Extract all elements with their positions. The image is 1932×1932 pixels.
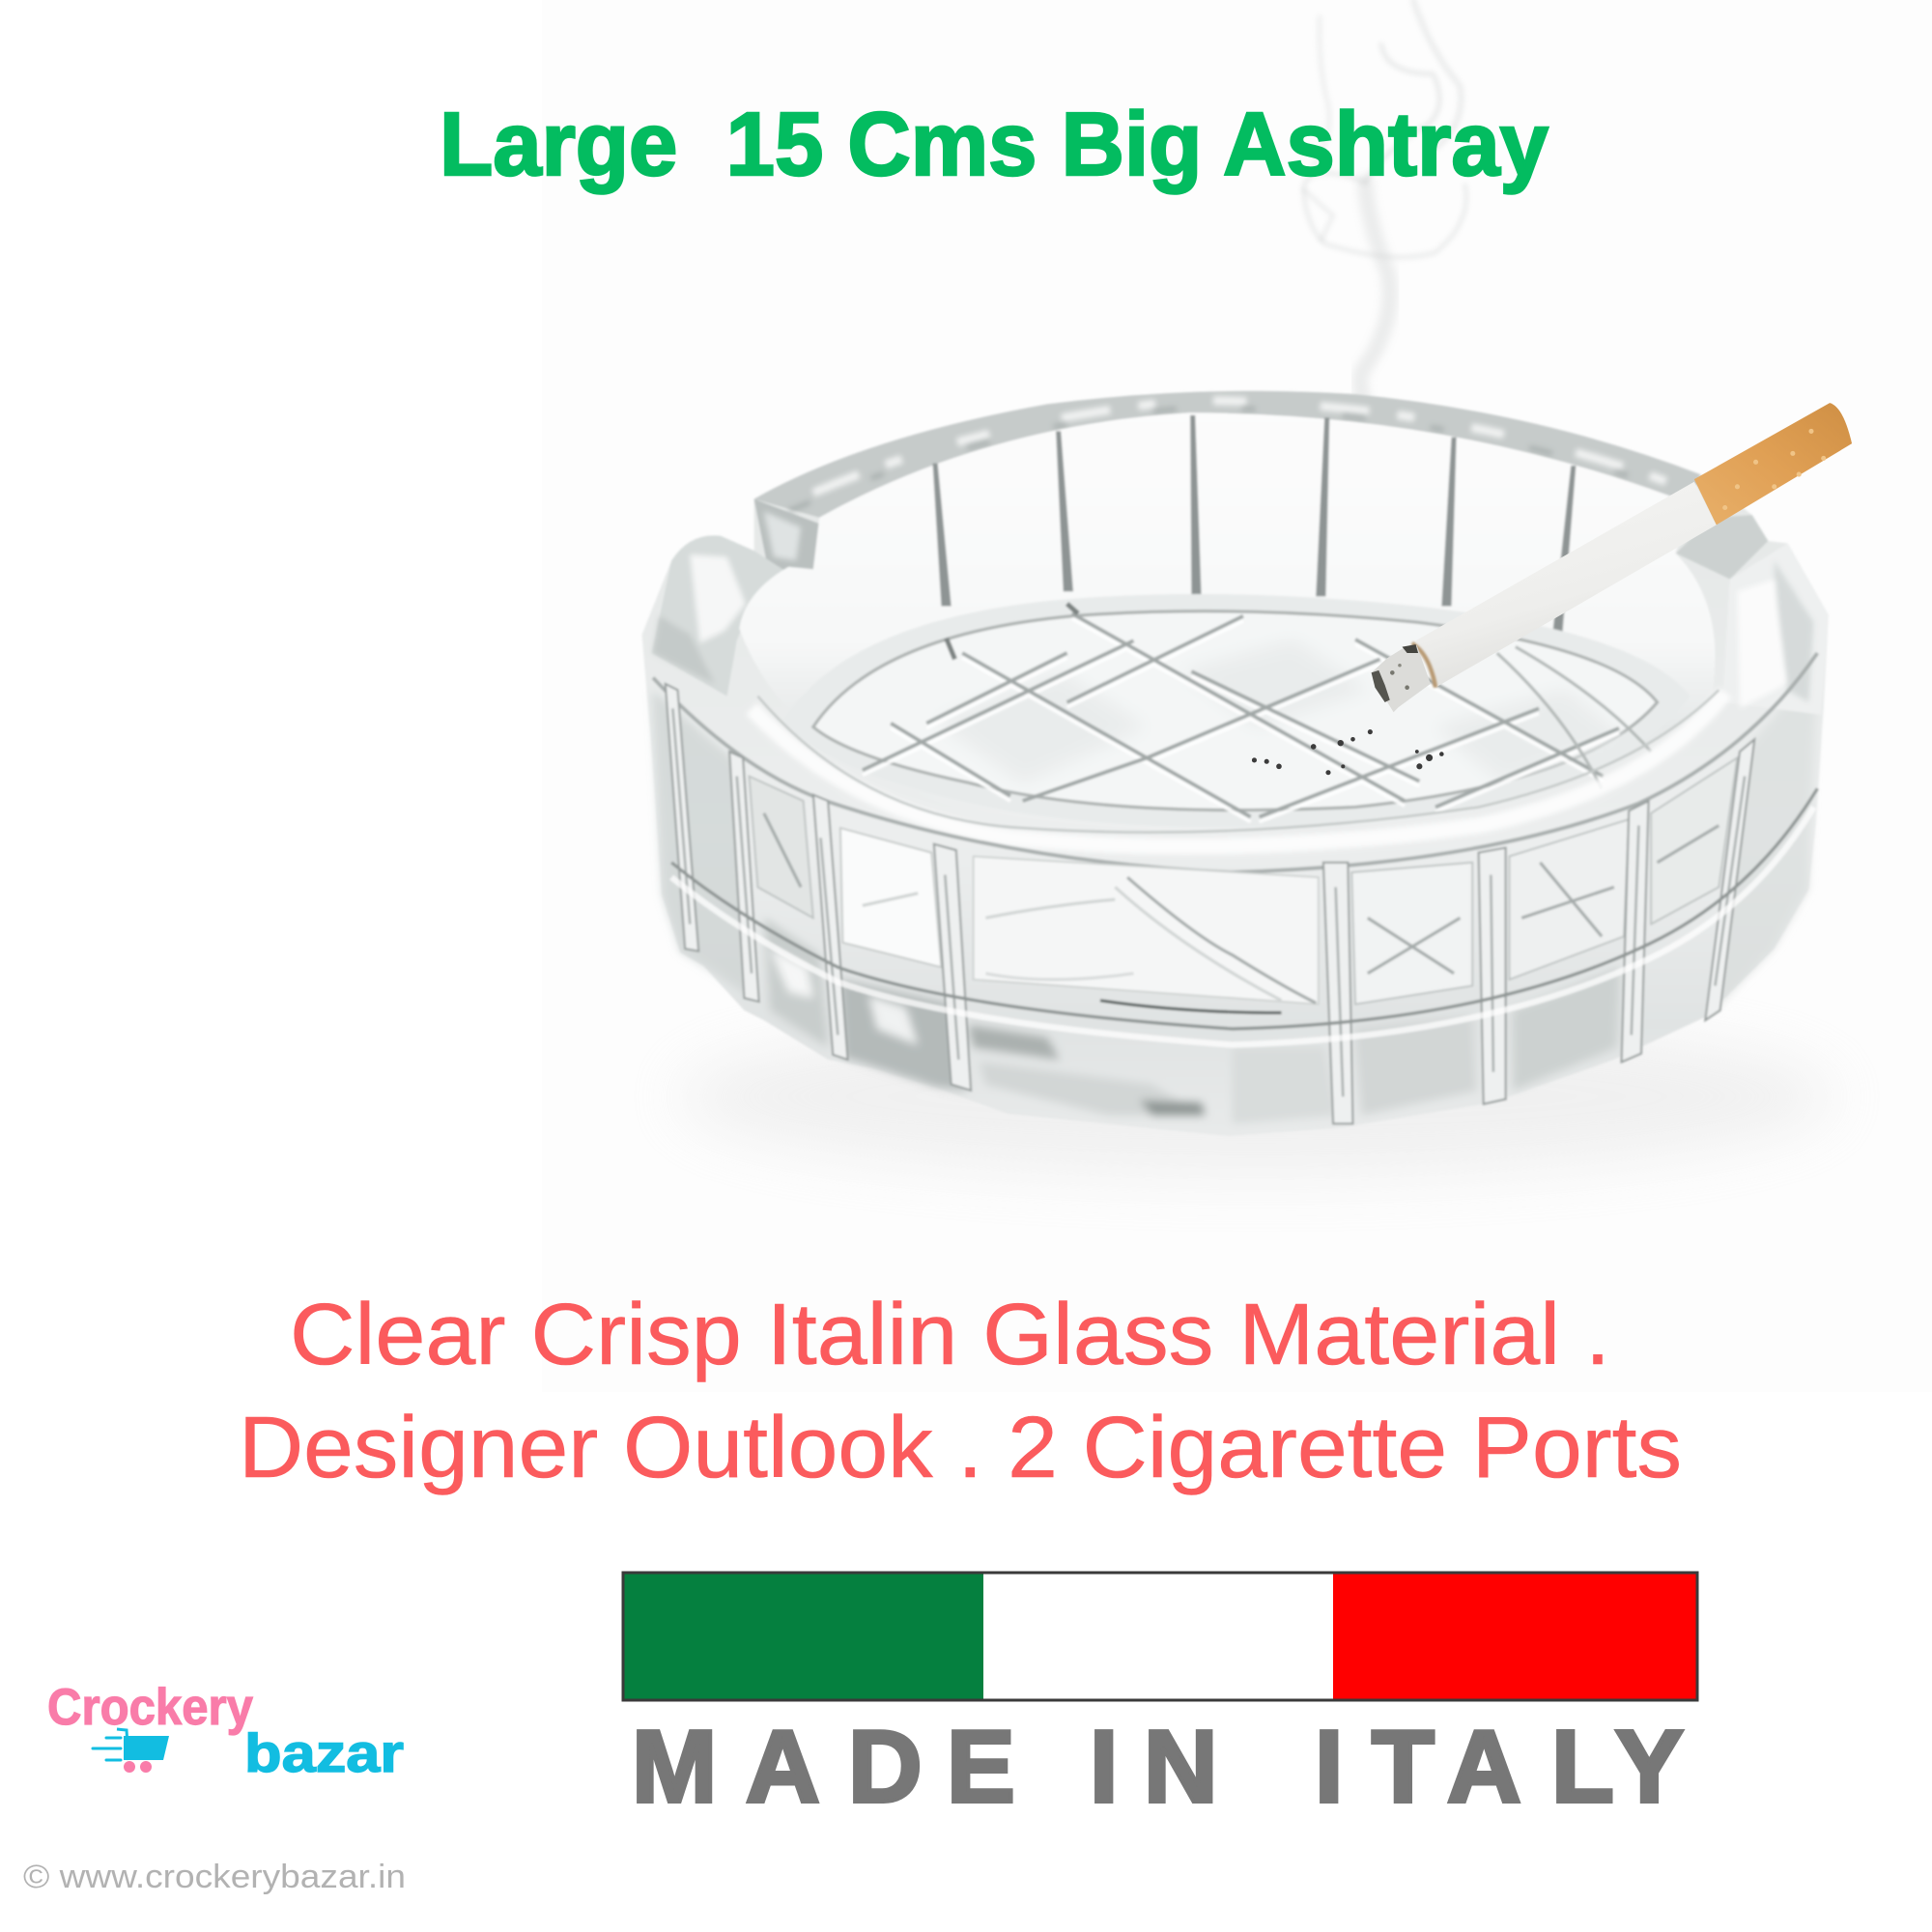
photo backdrop — [542, 0, 1932, 1392]
inner bowl wall — [739, 412, 1715, 830]
logo word bazar: bazar — [244, 1722, 404, 1783]
floor lattice — [863, 604, 1651, 817]
copyright website: © www.crockerybazar.in — [23, 1859, 406, 1895]
cigarette paper — [1416, 482, 1717, 688]
lower ring — [671, 788, 1817, 1029]
smoke rising from cigarette — [1303, 0, 1466, 542]
title: Large 15 Cms Big Ashtray — [440, 94, 1548, 194]
right rim block — [1676, 515, 1829, 715]
bowl floor ring — [782, 594, 1690, 827]
left side wall tone — [652, 690, 752, 998]
floor patches — [936, 640, 1627, 782]
back rim highlights — [788, 401, 1690, 511]
feature text — [239, 1287, 1682, 1496]
bowl floor — [813, 611, 1658, 810]
logo: crockery bazar — [47, 1679, 404, 1783]
floor lattice highlights — [863, 618, 1619, 822]
panel diagonal cuts — [764, 813, 1719, 1003]
cigarette — [1372, 403, 1852, 712]
back rim band — [754, 391, 1700, 518]
rib glints — [672, 708, 1745, 1096]
front panels — [750, 757, 1737, 1005]
burn edge — [1412, 643, 1435, 688]
ashtray body silhouette — [642, 391, 1829, 1136]
cigarette filter — [1694, 403, 1852, 525]
glass ashtray with cigarette — [642, 391, 1852, 1177]
Italian flag — [622, 1572, 1698, 1700]
floor shadow — [678, 1016, 1835, 1177]
cork dots — [1722, 429, 1826, 510]
lower dark glass band — [764, 918, 1620, 1123]
made in italy label: MADE IN ITALY — [632, 1710, 1684, 1824]
ash tip — [1372, 645, 1431, 712]
front vertical ribs — [666, 684, 1754, 1123]
logo word crockery: Crockery — [47, 1679, 253, 1736]
inner wall ribs — [933, 415, 1576, 635]
glass body — [642, 391, 1829, 1136]
bright lip highlight — [752, 693, 1725, 846]
left notch block — [652, 499, 819, 696]
front rim lip — [653, 653, 1817, 872]
ash specks — [1252, 729, 1444, 775]
feature line 2: Designer Outlook . 2 Cigarette Ports — [239, 1400, 1682, 1496]
feature line 1: Clear Crisp Italin Glass Material . — [290, 1287, 1610, 1383]
icon: shopping cart — [93, 1729, 169, 1773]
